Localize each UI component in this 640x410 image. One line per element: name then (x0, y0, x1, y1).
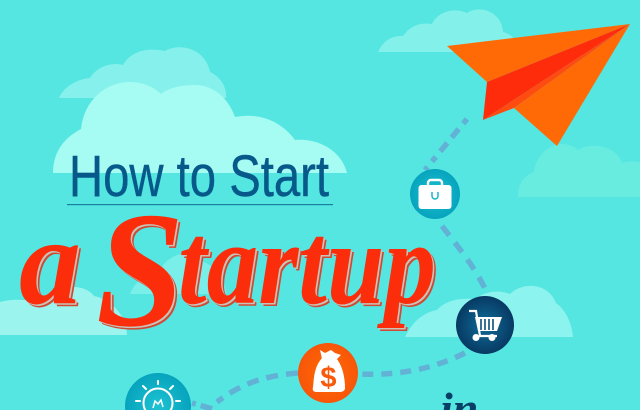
title shadow layer: S (99, 181, 187, 364)
title shadow layer (22, 181, 439, 364)
icon: light bulb (125, 373, 191, 410)
title inline layer (20, 180, 438, 362)
title shadow layer: a (22, 196, 84, 333)
cloud: right (518, 144, 640, 197)
title main layer: tartup (178, 198, 436, 329)
icon: money bag (298, 343, 358, 403)
icon: briefcase (410, 169, 460, 219)
title inline layer: tartup (180, 200, 438, 330)
heading: How to Start: How to Start (69, 144, 329, 209)
title main layer (19, 178, 436, 361)
icon: paper plane (447, 24, 630, 146)
cloud: large behind heading (53, 82, 347, 173)
cloud: bottom left (0, 287, 127, 335)
cloud: top right (378, 9, 515, 52)
title inline layer: S (98, 180, 186, 362)
heading underline (67, 204, 333, 205)
dashed flight path (192, 119, 487, 410)
title: a Startup (19, 178, 439, 364)
title main layer: a (19, 193, 81, 330)
title inline layer: a (20, 194, 82, 332)
dollar sign: $ (320, 362, 337, 394)
cloud: bottom right (405, 286, 573, 337)
cloud: behind Startup lettering (130, 253, 226, 294)
cloud: top left (59, 47, 226, 98)
title shadow layer: tartup (181, 201, 439, 332)
icon: shopping cart (456, 296, 514, 354)
title main layer: S (96, 178, 184, 361)
